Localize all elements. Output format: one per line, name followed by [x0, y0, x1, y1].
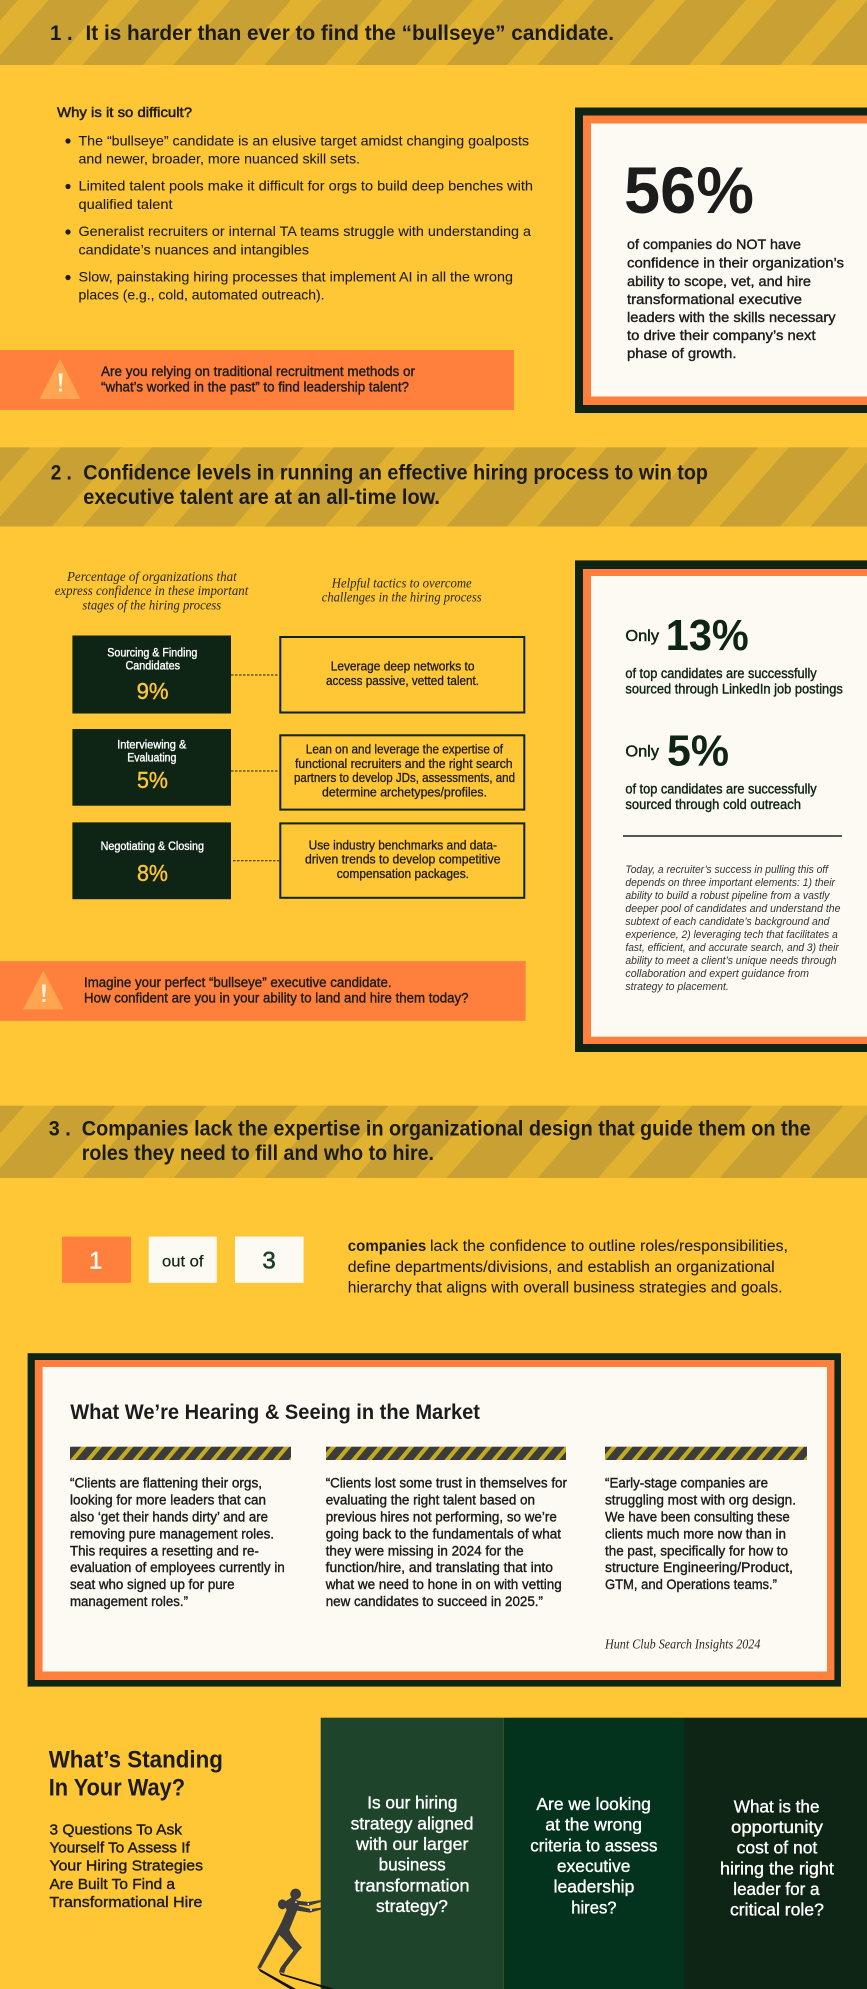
subheading: three questions: Your Hiring Strategies	[50, 1859, 203, 1875]
statistic: only 13%: 13%	[666, 611, 749, 660]
quote 2: “Clients lost some trust in themselves for	[326, 1476, 567, 1491]
subheading: three questions: 3 Questions To Ask	[50, 1822, 183, 1838]
question panel 1: with our larger	[355, 1834, 469, 1854]
question panel 2: at the wrong	[545, 1815, 642, 1835]
stage card: sourcing and finding candidates 9%: Candidates	[126, 660, 180, 672]
stage card: negotiating and closing 8%	[72, 822, 231, 899]
quote 1: “Clients are flattening their orgs,	[70, 1476, 262, 1491]
section 1 heading band: 1 .	[50, 21, 73, 45]
question panel 2: leadership	[554, 1877, 634, 1897]
connector 3	[233, 860, 279, 862]
statistic: 1 out of 3: 1	[89, 1248, 102, 1275]
paragraph: recruiter success elements: subtext of each candidate’s background and	[625, 916, 830, 928]
quote 3: “Early-stage companies are	[605, 1476, 768, 1491]
callout: traditional recruitment methods: Are you relying on traditional recruitment methods or	[101, 364, 415, 379]
paragraph: recruiter success elements: collaboration and expert guidance from	[625, 968, 809, 980]
icon: figure pushing the wall	[257, 1889, 335, 1989]
heading: what's standing in your way: In Your Way?	[49, 1774, 185, 1801]
question panel 1: strategy aligned	[351, 1813, 473, 1833]
icon: warning triangle	[23, 971, 64, 1009]
statistic: 1 out of 3: out of	[162, 1254, 204, 1271]
question panel 2: executive	[557, 1856, 630, 1876]
column header: percentage of organizations	[55, 569, 249, 612]
statistic description: to drive their company’s next	[627, 327, 816, 343]
quote 1	[70, 1476, 285, 1609]
statistic: only 5%	[625, 727, 817, 812]
callout: traditional recruitment methods	[0, 350, 514, 410]
tactic box: deep networks: access passive, vetted talent.	[326, 674, 479, 688]
question panel 1	[321, 1718, 504, 1989]
quote 3	[605, 1476, 796, 1592]
question panel 3: leader for a	[733, 1879, 820, 1899]
section 3 heading band: 3 .	[49, 1116, 71, 1140]
tactic box: functional recruiters: functional recruiters and the right search	[295, 757, 513, 771]
section 1 text: why is it so difficult: qualified talent	[78, 196, 173, 212]
quote 3: clients much more now than in	[605, 1526, 786, 1541]
statistic description	[627, 236, 844, 361]
question panel 1: Is our hiring	[367, 1793, 457, 1813]
section 1 text: why is it so difficult: candidate’s nuances and intangibles	[78, 242, 309, 258]
question panel 3	[684, 1718, 867, 1989]
statistic description: leaders with the skills necessary	[627, 309, 836, 325]
section 1 text: why is it so difficult: Slow, painstaking hiring processes that implement AI in all the wrong	[78, 269, 513, 285]
column header: helpful tactics	[322, 575, 482, 605]
quote 3: the past, specifically for how to	[605, 1543, 788, 1558]
statistic description: transformational executive	[627, 291, 802, 307]
statistic: only 13%: Only	[625, 628, 659, 645]
stage card: negotiating and closing 8%: 8%	[137, 860, 168, 886]
quote 2: going back to the fundamentals of what	[326, 1526, 561, 1541]
quote 3: We have been consulting these	[605, 1509, 790, 1524]
question panel 2: Are we looking	[536, 1794, 651, 1814]
question panel 3: critical role?	[730, 1900, 824, 1920]
text: companies lack the confidence: define departments/divisions, and establish an organizational	[348, 1259, 775, 1276]
stage card: negotiating and closing 8%: Negotiating & Closing	[101, 841, 204, 853]
statistic: only 5%: 5%	[667, 727, 729, 776]
section 1 text: why is it so difficult: Why is it so difficult?	[57, 104, 192, 120]
text: companies lack the confidence: companies	[348, 1238, 426, 1255]
section 1 text: why is it so difficult: and newer, broader, more nuanced skill sets.	[78, 151, 360, 167]
quote 2: previous hires not performing, so we’re	[326, 1509, 557, 1524]
section 1 text: why is it so difficult: The “bullseye” candidate is an elusive target amidst changing goalposts	[78, 132, 529, 148]
big number 56%: 56%	[624, 153, 754, 227]
stage card: interviewing and evaluating 5%: 5%	[137, 767, 168, 793]
stage card: sourcing and finding candidates 9%: 9%	[137, 678, 169, 704]
section 2 heading band: 2 .	[51, 460, 72, 484]
column header: helpful tactics: challenges in the hiring process	[322, 590, 482, 605]
paragraph: recruiter success elements: ability to meet a client’s unique needs through	[625, 955, 837, 967]
section 1 text: why is it so difficult: Limited talent pools make it difficult for orgs to build deep benches with	[78, 178, 533, 194]
quote 2: new candidates to succeed in 2025.”	[326, 1594, 543, 1609]
question panel 3: opportunity	[731, 1817, 823, 1837]
paragraph: recruiter success elements: Today, a recruiter’s success in pulling this off	[625, 864, 829, 876]
attribution: Hunt Club Search Insights 2024	[604, 1637, 761, 1652]
stage card: interviewing and evaluating 5%: Interviewing &	[117, 740, 187, 752]
quote 2: what we need to hone in on with vetting	[325, 1577, 562, 1592]
quote 1: looking for more leaders that can	[70, 1493, 266, 1508]
column header: helpful tactics: Helpful tactics to overcome	[331, 575, 472, 590]
paragraph: recruiter success elements: experience, 2) leveraging tech that facilitates a	[625, 929, 838, 941]
text: companies lack the confidence: hierarchy that aligns with overall business strategies and goals.	[348, 1279, 782, 1296]
quote 1: This requires a resetting and re-	[70, 1543, 259, 1558]
callout: perfect bullseye candidate: Imagine your perfect “bullseye” executive candidate.	[84, 975, 392, 990]
statistic: only 5%: sourced through cold outreach	[625, 797, 801, 812]
quote 2	[325, 1476, 567, 1609]
callout: perfect bullseye candidate	[0, 961, 526, 1021]
quote 2: function/hire, and translating that into	[326, 1560, 553, 1575]
statistic description: confidence in their organization’s	[627, 255, 844, 271]
quote 2: evaluating the right talent based on	[326, 1493, 535, 1508]
section 1 heading band	[0, 0, 867, 65]
heading: what's standing in your way	[49, 1746, 223, 1801]
stage card: interviewing and evaluating 5%: Evaluating	[127, 753, 176, 765]
quote 1: removing pure management roles.	[70, 1526, 274, 1541]
panel: sourcing statistics	[575, 560, 867, 1052]
question panel 2: criteria to assess	[530, 1835, 658, 1855]
paragraph: recruiter success elements: deeper pool of candidates and understand the	[625, 903, 840, 915]
paragraph: recruiter success elements: ability to build a robust pipeline from a vastly	[625, 890, 831, 902]
tactic box: functional recruiters: Lean on and leverage the expertise of	[306, 742, 503, 756]
tactic box: industry benchmarks: Use industry benchmarks and data-	[309, 838, 497, 852]
statistic: only 13%: of top candidates are successfully	[625, 666, 817, 681]
section 1 text: why is it so difficult: places (e.g., cold, automated outreach).	[78, 287, 324, 303]
question panel 1: transformation	[354, 1875, 470, 1895]
statistic: only 13%: sourced through LinkedIn job postings	[625, 682, 843, 696]
section 1 text: why is it so difficult: Generalist recruiters or internal TA teams struggle with understanding a	[78, 223, 531, 239]
stage card: interviewing and evaluating 5%	[72, 729, 231, 806]
hazard bar 3	[605, 1447, 807, 1460]
panel: 56% statistic	[575, 108, 867, 413]
question panel 2	[504, 1718, 684, 1989]
section 3 heading band: roles they need to fill and who to hire.	[82, 1141, 434, 1165]
subheading: three questions: Are Built To Find a	[50, 1877, 176, 1893]
quote 3: structure Engineering/Product,	[605, 1560, 793, 1575]
column header: percentage of organizations: express confidence in these important	[55, 583, 249, 598]
tactic box: industry benchmarks: driven trends to develop competitive	[305, 853, 501, 867]
statistic: only 5%: of top candidates are successfully	[625, 782, 817, 796]
question panel 3: What is the	[734, 1796, 820, 1816]
tactic box: industry benchmarks	[280, 823, 524, 898]
callout: traditional recruitment methods: “what’s worked in the past” to find leadership talent?	[101, 380, 409, 395]
section 2 heading band: Confidence levels in running an effective hiring process to win top	[83, 460, 708, 484]
statistic: only 13%	[625, 611, 843, 696]
question panel 3: hiring the right	[720, 1858, 834, 1878]
text: companies lack the confidence: lack the confidence to outline roles/responsibilities,	[430, 1238, 788, 1255]
question panel 1: strategy?	[376, 1896, 448, 1916]
subheading: three questions: Yourself To Assess If	[50, 1841, 191, 1857]
quote 1: also ‘get their hands dirty’ and are	[70, 1509, 268, 1524]
tactic box: deep networks: Leverage deep networks to	[331, 660, 475, 674]
callout: perfect bullseye candidate: How confident are you in your ability to land and hire them today?	[84, 990, 468, 1005]
stage card: sourcing and finding candidates 9%: Sourcing & Finding	[107, 647, 197, 659]
section 1 text: why is it so difficult	[57, 104, 533, 303]
paragraph: recruiter success elements: depends on three important elements: 1) their	[625, 877, 836, 889]
quote 3: GTM, and Operations teams.”	[605, 1577, 777, 1592]
statistic description: of companies do NOT have	[627, 236, 801, 252]
quote 3: struggling most with org design.	[605, 1493, 796, 1508]
text: companies lack the confidence	[348, 1238, 788, 1296]
stage card: sourcing and finding candidates 9%	[72, 636, 231, 714]
panel: what we're hearing and seeing	[28, 1353, 841, 1687]
subheading: three questions	[50, 1822, 203, 1911]
section 1 heading band: It is harder than ever to find the “bullseye” candidate.	[86, 21, 614, 45]
statistic description: ability to scope, vet, and hire	[627, 273, 811, 289]
statistic: 1 out of 3	[62, 1237, 304, 1283]
section 3 heading band	[0, 1106, 867, 1178]
statistic description: phase of growth.	[627, 345, 736, 361]
icon: warning triangle	[40, 359, 80, 399]
question panel 1: business	[379, 1855, 446, 1875]
connector 2	[231, 770, 278, 772]
tactic box: deep networks	[280, 637, 524, 712]
connector 1	[231, 674, 278, 676]
hazard bar 2	[326, 1447, 566, 1460]
panel heading: What We’re Hearing & Seeing in the Market	[70, 1400, 480, 1424]
section 3 heading band: Companies lack the expertise in organizational design that guide them on the	[82, 1116, 811, 1140]
quote 1: seat who signed up for pure	[70, 1577, 234, 1592]
tactic box: functional recruiters: determine archetypes/profiles.	[322, 785, 487, 799]
column header: percentage of organizations: stages of the hiring process	[82, 597, 221, 612]
paragraph: recruiter success elements: fast, efficient, and accurate search, and 3) their	[625, 942, 840, 954]
column header: percentage of organizations: Percentage of organizations that	[66, 569, 238, 584]
statistic: only 5%: Only	[625, 743, 659, 760]
paragraph: recruiter success elements: strategy to placement.	[625, 981, 729, 993]
heading: what's standing in your way: What’s Standing	[49, 1746, 223, 1773]
question panel 2: hires?	[571, 1897, 617, 1917]
quote 1: evaluation of employees currently in	[70, 1560, 285, 1575]
tactic box: functional recruiters: partners to develop JDs, assessments, and	[294, 771, 515, 785]
section 2 heading band: executive talent are at an all-time low.	[83, 485, 440, 509]
question panel 3: cost of not	[737, 1838, 817, 1858]
paragraph: recruiter success elements	[625, 864, 840, 993]
quote 1: management roles.”	[70, 1594, 188, 1609]
hazard bar 1	[70, 1447, 291, 1460]
subheading: three questions: Transformational Hire	[50, 1895, 202, 1911]
section 2 heading band	[0, 447, 867, 526]
statistic: 1 out of 3: 3	[262, 1248, 276, 1275]
tactic box: functional recruiters	[280, 735, 524, 810]
quote 2: they were missing in 2024 for the	[326, 1543, 524, 1558]
tactic box: industry benchmarks: compensation packages.	[337, 867, 469, 881]
